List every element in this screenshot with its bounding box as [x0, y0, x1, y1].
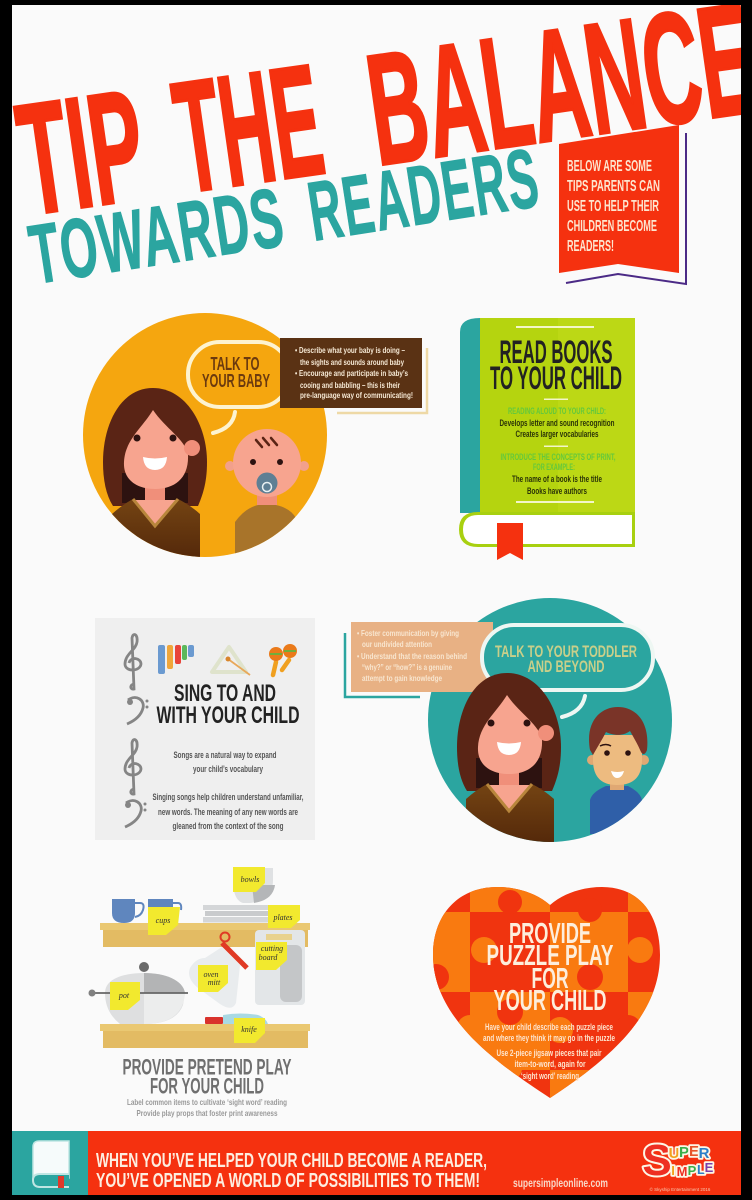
illustration: bowls and plates: plates: [272, 913, 293, 922]
heading: pretend play: [122, 1054, 292, 1098]
ribbon callout: [559, 125, 686, 284]
ribbon callout: READERS!: [567, 238, 614, 255]
logo: super simple: U: [669, 1145, 679, 1162]
heading: puzzle play: PUZZLE PLAY: [486, 940, 614, 972]
icon: xylophone: [158, 645, 194, 674]
illustration: pot: pot: [118, 991, 130, 1000]
sing text: Songs are a natural way to expand: [174, 750, 277, 761]
heading: sing: WITH YOUR CHILD: [156, 702, 300, 729]
illustration: oven mitt: oven: [203, 970, 219, 979]
icon: bookmark: [497, 523, 523, 560]
panel: read books book: [459, 318, 635, 560]
heading: read books: TO YOUR CHILD: [490, 360, 622, 396]
title: tip the balance: TIP: [8, 57, 155, 249]
illustration: cutting board: cutting: [261, 944, 283, 953]
illustration: oven mitt: [189, 932, 247, 1008]
panel: pretend play shelves: [88, 867, 310, 1118]
logo: super simple: © Skyship Entertainment 2016: [650, 1186, 711, 1192]
icon: bass clef: [127, 698, 148, 724]
ribbon callout: BELOW ARE SOME: [567, 158, 652, 175]
puzzle text: [483, 1022, 615, 1081]
sing text: Singing songs help children understand unfamiliar,: [152, 792, 304, 803]
logo: super simple: L: [697, 1162, 705, 1177]
heading: pretend play: PROVIDE PRETEND PLAY: [122, 1054, 292, 1080]
footer message: YOU’VE OPENED A WORLD OF POSSIBILITIES TO THEM!: [96, 1170, 480, 1192]
icon: book: [33, 1141, 69, 1188]
subtitle: towards readers: READERS: [302, 130, 546, 259]
title: tip the balance: [12, 5, 741, 214]
callout: toddler tips: “why?” or “how?” is a genuine: [362, 662, 452, 672]
callout: toddler tips: • Understand that the reason behind: [357, 651, 467, 661]
illustration: knife: knife: [241, 1025, 257, 1034]
panel: talk to your toddler: [345, 598, 672, 842]
heading: puzzle play: YOUR CHILD: [494, 985, 606, 1017]
callout: baby tips: [280, 338, 427, 413]
illustration: bowls and plates: bowls: [241, 875, 259, 884]
book text: Develops letter and sound recognition: [500, 418, 614, 428]
logo: super simple: P: [688, 1163, 697, 1178]
book text: INTRODUCE THE CONCEPTS OF PRINT,: [500, 452, 616, 462]
pretend play text: Label common items to cultivate ‘sight word’ reading: [127, 1097, 287, 1107]
speech bubble: TALK TO YOUR TODDLER: [495, 642, 637, 661]
illustration: cutting board: board: [259, 953, 278, 962]
ribbon callout: USE TO HELP THEIR: [567, 198, 659, 215]
callout: toddler tips: • Foster communication by giving: [357, 628, 459, 638]
sing text: new words. The meaning of any new words are: [158, 807, 298, 818]
book text: READING ALOUD TO YOUR CHILD:: [508, 406, 606, 416]
speech bubble: [188, 342, 290, 433]
heading: read books: [490, 334, 622, 396]
logo: super simple: E: [705, 1160, 714, 1175]
speech bubble: TALK TO: [210, 354, 260, 374]
callout: toddler tips: our undivided attention: [362, 639, 432, 649]
sing text: [152, 750, 304, 832]
speech bubble: [482, 625, 653, 717]
illustration: oven mitt: mitt: [208, 978, 221, 987]
illustration: bowls and plates: [203, 867, 300, 928]
panel: sing to and with your child: [95, 618, 315, 840]
shelf bottom: [100, 1024, 310, 1048]
logo: super simple: I: [671, 1163, 675, 1178]
icon: maracas: [269, 644, 297, 675]
callout: toddler tips: attempt to gain knowledge: [362, 673, 442, 683]
puzzle text: Use 2-piece jigsaw pieces that pair: [496, 1048, 602, 1058]
subtitle: towards readers: TOWARDS: [23, 170, 291, 302]
logo: super simple: M: [677, 1164, 687, 1179]
logo: super simple: E: [689, 1143, 699, 1160]
illustration: baby: [225, 429, 309, 557]
icon: treble clef: [125, 740, 141, 794]
icon: triangle: [212, 647, 250, 675]
speech bubble: YOUR BABY: [202, 371, 270, 391]
logo: super simple: S: [642, 1136, 672, 1185]
panel: puzzle heart: [433, 887, 660, 1098]
sing text: your child’s vocabulary: [193, 764, 263, 775]
heading: sing: SING TO AND: [174, 680, 276, 707]
callout: toddler tips: [345, 622, 493, 697]
callout: baby tips: • Encourage and participate in baby’s: [295, 368, 408, 378]
callout: baby tips: pre-language way of communicating!: [300, 390, 413, 400]
book text: Books have authors: [527, 486, 587, 496]
heading: puzzle play: FOR: [532, 963, 569, 995]
illustration: mother: [457, 673, 561, 842]
heading: sing: [156, 680, 300, 729]
illustration: boy: [587, 707, 649, 834]
footer message: [96, 1150, 487, 1192]
heading: pretend play: FOR YOUR CHILD: [150, 1074, 264, 1098]
speech bubble: AND BEYOND: [528, 657, 604, 676]
book text: Creates larger vocabularies: [516, 429, 598, 439]
heading: puzzle play: PROVIDE: [509, 918, 591, 950]
logo: super simple: P: [679, 1144, 689, 1161]
book text: FOR EXAMPLE:: [533, 462, 575, 472]
book text: The name of a book is the title: [512, 474, 602, 484]
panel: talk to your baby: [83, 313, 427, 557]
book text: [500, 406, 616, 496]
logo: super simple: R: [699, 1145, 710, 1162]
heading: read books: READ BOOKS: [500, 334, 612, 370]
ribbon callout: CHILDREN BECOME: [567, 218, 657, 235]
illustration: cups: [112, 899, 181, 935]
website: supersimpleonline.com: [513, 1178, 608, 1190]
pretend play text: [127, 1097, 287, 1118]
illustration: knife: [205, 1014, 268, 1043]
pretend play text: Provide play props that foster print awareness: [136, 1108, 278, 1118]
puzzle text: item-to-word, again for: [514, 1059, 586, 1069]
puzzle text: and where they think it may go in the puzzle: [483, 1033, 615, 1043]
footer message: WHEN YOU’VE HELPED YOUR CHILD BECOME A READER,: [96, 1150, 487, 1172]
illustration: cutting board: [255, 930, 305, 1005]
callout: baby tips: the sights and sounds around baby: [300, 357, 404, 367]
illustration: cups: cups: [156, 916, 170, 925]
callout: baby tips: • Describe what your baby is doing –: [295, 345, 405, 355]
footer banner: [12, 1131, 741, 1195]
puzzle text: ‘sight word’ reading: [521, 1071, 579, 1081]
title: tip the balance: THE: [164, 32, 333, 226]
icon: bass clef: [125, 801, 146, 827]
shelf top: [100, 923, 310, 947]
puzzle text: Have your child describe each puzzle piece: [485, 1022, 613, 1032]
illustration: pot: [88, 962, 188, 1024]
illustration: mother: [103, 388, 207, 557]
heading: puzzle play: [486, 918, 614, 1017]
ribbon callout: TIPS PARENTS CAN: [567, 178, 660, 195]
callout: baby tips: cooing and babbling – this is their: [300, 380, 400, 390]
sing text: gleaned from the context of the song: [172, 821, 284, 832]
logo: super simple: [642, 1136, 714, 1192]
icon: treble clef: [125, 635, 141, 689]
